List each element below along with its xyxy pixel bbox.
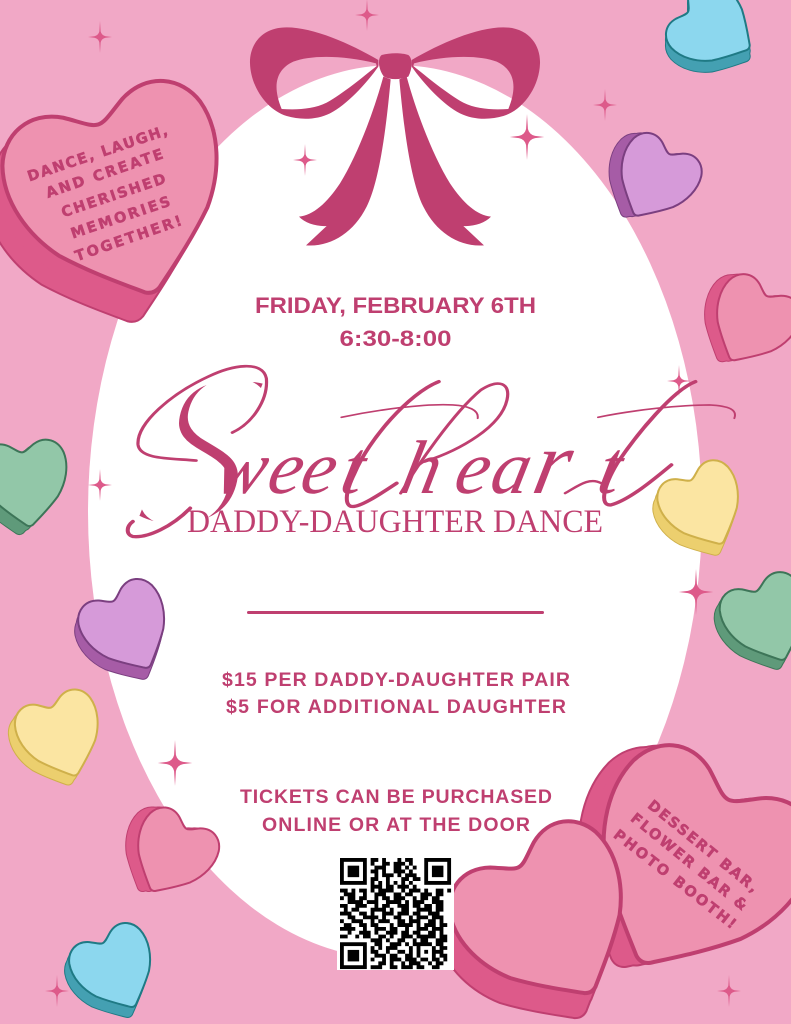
ticket prices: $5 FOR ADDITIONAL DAUGHTER	[226, 696, 566, 718]
candy heart: dance message	[0, 68, 255, 353]
event date and time	[255, 293, 536, 351]
candy heart: purple top right	[588, 126, 709, 235]
heart message text	[610, 798, 761, 933]
heart message text	[26, 123, 184, 265]
divider line	[247, 611, 544, 614]
heart message text: DESSERT BAR,	[644, 798, 761, 896]
script title: Sweetheart: e	[294, 426, 346, 510]
candy heart: green left	[0, 438, 72, 539]
heart message text: DANCE, LAUGH,	[26, 123, 170, 185]
heart message text: CHERISHED	[60, 171, 168, 221]
script title: Sweetheart: h	[394, 426, 450, 510]
ticket prices: $15 PER DADDY-DAUGHTER PAIR	[222, 669, 570, 691]
candy heart: pink lower left	[105, 800, 227, 910]
candy heart: large blank bottom center	[424, 806, 666, 1024]
ticket purchase info: ONLINE OR AT THE DOOR	[262, 814, 530, 836]
script title: Sweetheart: r	[526, 413, 583, 513]
script title: Sweetheart: S	[117, 323, 286, 577]
icon: ribbon bow	[250, 27, 540, 246]
candy heart: blue top right	[659, 0, 770, 94]
candy heart: blue bottom left	[58, 917, 170, 1024]
script title: Sweetheart: t	[591, 426, 632, 510]
candy heart: yellow left	[3, 684, 115, 798]
QR code	[337, 855, 454, 970]
heart message text: MEMORIES	[69, 194, 173, 242]
subtitle: daddy-daughter dance: DADDY-DAUGHTER DANCE	[187, 504, 603, 540]
candy heart: yellow right	[646, 454, 758, 572]
ticket purchase info: TICKETS CAN BE PURCHASED	[240, 786, 552, 808]
ticket purchase info	[240, 786, 552, 836]
candy heart: purple left	[67, 572, 186, 698]
heart message text: FLOWER BAR &	[627, 811, 750, 914]
heart message text: PHOTO BOOTH!	[610, 827, 739, 933]
script title: Sweetheart: a	[484, 426, 540, 510]
script title: Sweetheart: t	[334, 426, 375, 510]
event date and time: FRIDAY, FEBRUARY 6TH	[255, 293, 536, 318]
candy heart: pink right	[683, 267, 791, 381]
white oval panel	[88, 65, 702, 959]
ticket prices	[222, 669, 570, 718]
script title: Sweetheart: e	[261, 426, 313, 510]
script title: Sweetheart: e	[448, 426, 500, 510]
event date and time: 6:30-8:00	[340, 326, 452, 351]
script title: Sweetheart: w	[208, 426, 277, 510]
candy heart: green right	[708, 566, 791, 684]
title flourishes	[128, 366, 735, 537]
heart message text: TOGETHER!	[73, 213, 184, 265]
heart message text: AND CREATE	[44, 147, 165, 202]
candy heart: dessert message	[525, 727, 791, 1014]
